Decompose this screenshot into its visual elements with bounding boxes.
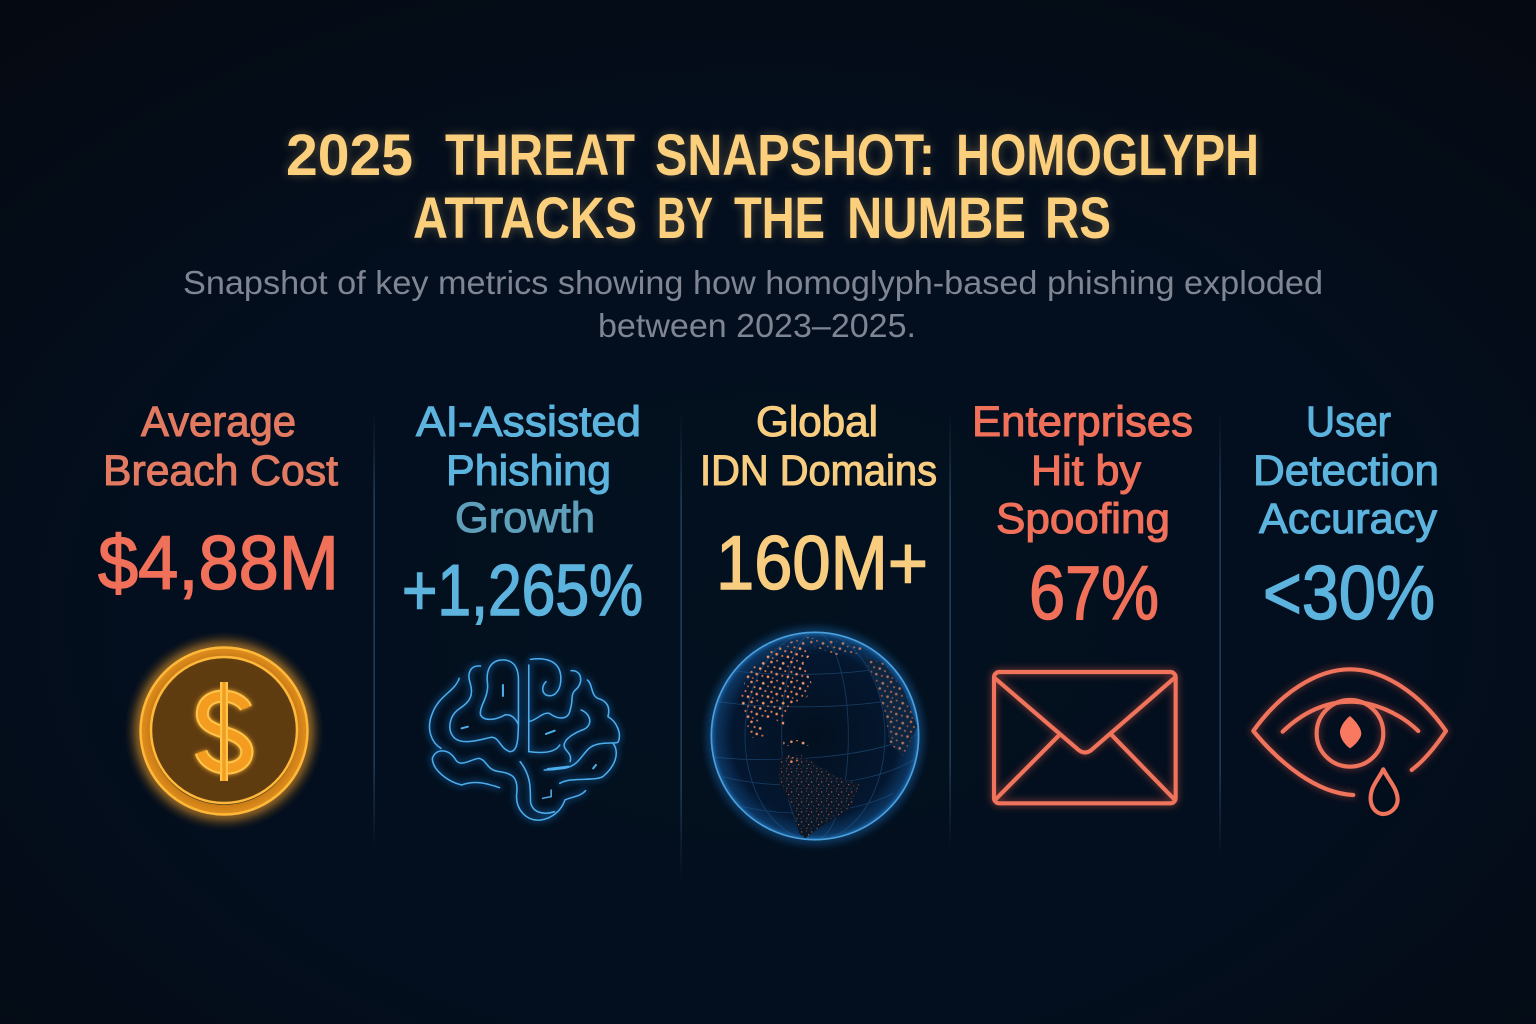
subtitle	[183, 264, 1323, 344]
label: average breach cost: Average	[141, 398, 296, 446]
label: user detection accuracy: User	[1306, 398, 1391, 446]
subtitle: Snapshot of key metrics showing how homoglyph-based phishing exploded	[183, 264, 1323, 301]
label: global IDN domains: Global	[756, 398, 878, 446]
continent: North America	[740, 647, 812, 743]
title: THREAT	[445, 123, 635, 188]
label: user detection accuracy: Detection	[1253, 447, 1439, 495]
label: average breach cost: Breach Cost	[103, 447, 338, 495]
label: global IDN domains: IDN Domains	[700, 447, 937, 495]
icon: brain	[430, 659, 619, 820]
panel: AI-assisted phishing growth	[402, 398, 643, 820]
panel: enterprises hit by spoofing	[972, 398, 1193, 803]
panel: average breach cost	[98, 398, 339, 831]
value: <30%: <30%	[1263, 551, 1435, 636]
label: enterprises hit by spoofing	[972, 398, 1193, 543]
value: +1,265%: +1,265%	[402, 551, 643, 631]
continent: Africa and Europe	[863, 657, 917, 756]
arctic lights	[770, 637, 863, 655]
title	[286, 123, 1259, 251]
title: SNAPSHOT:	[655, 123, 935, 188]
label: user detection accuracy	[1253, 398, 1439, 543]
Caribbean lights	[783, 740, 808, 763]
subtitle: between 2023–2025.	[598, 307, 916, 344]
title: RS	[1045, 186, 1111, 251]
icon: eye with tear	[1253, 669, 1446, 814]
icon: globe	[706, 627, 924, 845]
icon: dollar coin	[124, 631, 324, 831]
label: AI-assisted phishing growth	[416, 398, 641, 542]
title: NUMBE	[847, 186, 1026, 251]
title: 2025	[286, 123, 413, 188]
panel: global IDN domains	[700, 398, 937, 845]
label: AI-assisted phishing growth: AI-Assisted	[416, 398, 641, 446]
label: average breach cost	[103, 398, 338, 495]
label: global IDN domains	[700, 398, 937, 495]
label: user detection accuracy: Accuracy	[1259, 495, 1437, 543]
title: BY	[657, 186, 713, 251]
title: HOMOGLYPH	[956, 123, 1259, 188]
title: THE	[734, 186, 825, 251]
label: enterprises hit by spoofing: Hit by	[1031, 447, 1141, 495]
value: 67%: 67%	[1029, 551, 1159, 636]
label: enterprises hit by spoofing: Enterprises	[972, 398, 1193, 446]
continent: South America	[779, 756, 850, 838]
label: enterprises hit by spoofing: Spoofing	[996, 495, 1170, 543]
icon: envelope	[994, 672, 1176, 803]
title: ATTACKS	[413, 186, 637, 251]
value: $4,88M: $4,88M	[98, 521, 339, 606]
label: AI-assisted phishing growth: Phishing	[446, 447, 611, 495]
label: AI-assisted phishing growth: Growth	[455, 494, 595, 542]
value: 160M+: 160M+	[716, 521, 928, 606]
panel: user detection accuracy	[1253, 398, 1446, 814]
